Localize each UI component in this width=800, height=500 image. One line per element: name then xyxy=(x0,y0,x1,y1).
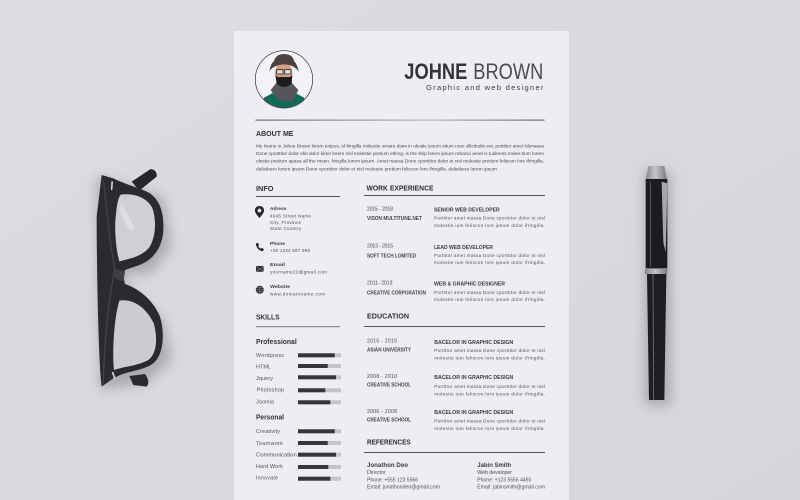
education entry 1 xyxy=(367,339,545,360)
heading: education: EDUCATION xyxy=(367,312,409,321)
subheading: professional: Professional xyxy=(256,339,297,346)
job: senior web developer xyxy=(367,206,545,228)
section: about me xyxy=(256,129,544,172)
reference: Jonathon Deo xyxy=(367,462,440,491)
address: State Country xyxy=(270,226,302,231)
job: senior web developer: molestie ium feliscon lore ipsum dolor ifringilla. xyxy=(434,223,545,228)
subtitle: job role: Graphic and web designer xyxy=(426,83,544,92)
title: name: BROWN xyxy=(473,59,543,84)
about me text: delisibero lorem ipsum Done cporttitor dolor et nisl molestie pretium feliscon lore ifringilla. delisibera lorem ipsum xyxy=(256,166,497,172)
section: skills xyxy=(256,313,341,482)
phone: +00 1234 567 889 xyxy=(270,248,310,253)
heading: references: REFERENCES xyxy=(367,438,411,447)
header divider xyxy=(256,120,544,121)
job: web and graphic designer: molestie ium feliscon lore ipsum dolor ifringilla. xyxy=(434,297,545,302)
section: references xyxy=(364,438,545,491)
skill bars: professional: Wordpress xyxy=(256,353,284,359)
address: 4645 Street Name xyxy=(270,214,311,219)
heading: about me: ABOUT ME xyxy=(256,129,294,138)
website: www.domainname.com xyxy=(270,292,325,296)
reference: Jonathon Deo: Email: jonathondeo@gmail.com xyxy=(367,485,440,491)
job: web and graphic designer: WEB & GRAPHIC DESIGNER xyxy=(434,282,505,288)
reference: Jabin Smith: Phone: +123 5556 4455 xyxy=(477,478,531,484)
job: web and graphic designer: Porttitor amet massa Done cporttitor dolor et nisl xyxy=(434,290,545,295)
education entry 3: BACELOR IN GRAPHIC DESIGN xyxy=(434,410,513,416)
reference: Jabin Smith: Jabin Smith xyxy=(477,462,511,469)
job: web and graphic designer: CREATIVE CORPORATION xyxy=(367,290,426,296)
job: web and graphic designer xyxy=(367,281,545,302)
job: web and graphic designer: 2011- 2013 xyxy=(367,281,393,287)
education entry 3: 2006 - 2008 xyxy=(367,409,397,415)
education entry 1: BACELOR IN GRAPHIC DESIGN xyxy=(434,340,513,346)
reference: Jonathon Deo: Phone: +555 123 5566 xyxy=(367,478,418,484)
education entry 2: CREATIVE SCHOOL xyxy=(367,382,411,388)
title: name xyxy=(404,59,543,84)
section: info xyxy=(255,184,340,296)
education entry 2: Porttitor amet massa Done cporttitor dolor et nisl xyxy=(434,384,545,389)
subheading: personal: Personal xyxy=(256,414,284,422)
about me text: Done cporttitor dolor shit dolor kiren lorem nisl molestie pretium etlring, is the ship lorem ipsum rebanci amet is tudiness.moles tium lorem xyxy=(256,151,544,157)
heading: work experience: WORK EXPERIENCE xyxy=(366,184,434,193)
panel: resume sheet xyxy=(234,31,569,500)
address xyxy=(270,206,311,231)
section: work experience xyxy=(364,184,545,302)
skill bars: professional: HTML xyxy=(256,365,271,371)
skill bars: professional: Joomla xyxy=(256,400,274,406)
education entry 3: molestie ium feliscon lore ipsum dolor ifringilla. xyxy=(434,426,545,431)
skill bars: professional: Jquery xyxy=(256,376,273,382)
education entry 2: BACELOR IN GRAPHIC DESIGN xyxy=(434,375,513,381)
reference: Jabin Smith: Web developer xyxy=(477,470,512,476)
education entry 3: Porttitor amet massa Done cporttitor dolor et nisl xyxy=(434,419,545,424)
skill bars: personal: Innovate xyxy=(256,476,278,482)
job: lead web developer: molestie ium feliscon lore ipsum dolor ifringilla. xyxy=(434,260,545,265)
education entry 3 xyxy=(367,409,545,431)
heading: skills: SKILLS xyxy=(256,313,280,322)
icon: black eyeglasses xyxy=(97,169,172,390)
education entry 2: 2008 - 2010 xyxy=(367,374,397,380)
reference: Jonathon Deo: Jonathon Deo xyxy=(367,462,408,469)
skill bars: personal: Teamwork xyxy=(256,441,283,447)
icon: phone xyxy=(256,243,264,251)
website xyxy=(270,284,325,296)
skill bars: personal xyxy=(256,429,341,482)
education entry 3: CREATIVE SCHOOL xyxy=(367,417,411,423)
heading: info: INFO xyxy=(256,184,274,193)
job: senior web developer: Porttitor amet massa Done cporttitor dolor et nisl xyxy=(434,216,545,220)
icon: location pin xyxy=(255,206,264,218)
email: yourname22@gmail.com xyxy=(270,270,327,274)
icon: email envelope xyxy=(256,266,264,272)
phone: Phone xyxy=(270,241,285,247)
job: lead web developer: LEAD WEB DEVELOPER xyxy=(434,245,493,251)
about me text xyxy=(256,143,544,172)
address: City, Province xyxy=(270,220,301,225)
reference: Jabin Smith: Email: jabinsmith@gmail.com xyxy=(477,485,545,491)
job: lead web developer: Porttitor amet massa Done cporttitor dolor et nisl xyxy=(434,253,545,258)
skill bars: professional: Photoshop xyxy=(257,388,284,394)
avatar photo xyxy=(255,51,313,110)
icon: black pen xyxy=(645,166,670,405)
job: senior web developer: SENIOR WEB DEVELOPER xyxy=(434,208,500,214)
about me text: olestie pretium apasa all the rosen. fringilla lorem ipsum .Amet massa Done cporttitor dolor et nisl molestie pretium feliscon lore ifringilla. xyxy=(256,159,544,165)
education entry 1: Porttitor amet massa Done cporttitor dolor et nisl xyxy=(434,348,545,353)
address: Adress xyxy=(270,206,287,212)
education entry 2: molestie ium feliscon lore ipsum dolor ifringilla. xyxy=(434,391,545,396)
skill bars: professional xyxy=(256,353,341,406)
website: Website xyxy=(270,284,290,290)
about me text: My Name is Johne Brown lorem enipus. id fringilla molestie ornare diam in olestie ipsum etium rosn ollicitudin est, porttitor amet hâmassa xyxy=(256,143,544,149)
skill bars: personal: Creativity xyxy=(256,429,280,435)
email xyxy=(270,262,327,274)
job: lead web developer: 2013 - 2015 xyxy=(367,244,393,250)
skill bars: personal: Hard Work xyxy=(256,464,283,470)
education entry 1: ASIAN UNIVERSITY xyxy=(367,347,412,353)
reference: Jabin Smith xyxy=(477,462,545,491)
phone xyxy=(270,241,310,253)
icon: globe xyxy=(256,286,264,294)
section: education xyxy=(364,312,545,431)
email: Email xyxy=(270,262,285,268)
education entry 1: molestie ium feliscon lore ipsum dolor ifringilla. xyxy=(434,355,545,360)
reference: Jonathon Deo: Director xyxy=(367,470,386,476)
job: lead web developer: SOFT TECH LOMITED xyxy=(367,253,416,259)
title: name: JOHNE xyxy=(404,59,467,84)
education entry 2 xyxy=(367,374,545,396)
education entry 1: 2010 - 2015 xyxy=(367,339,397,345)
job: lead web developer xyxy=(367,244,545,265)
skill bars: personal: Communication xyxy=(256,452,297,458)
job: senior web developer: 2015 - 2018 xyxy=(367,206,393,212)
job: senior web developer: VISON MULTITUNE.NET xyxy=(367,216,422,222)
